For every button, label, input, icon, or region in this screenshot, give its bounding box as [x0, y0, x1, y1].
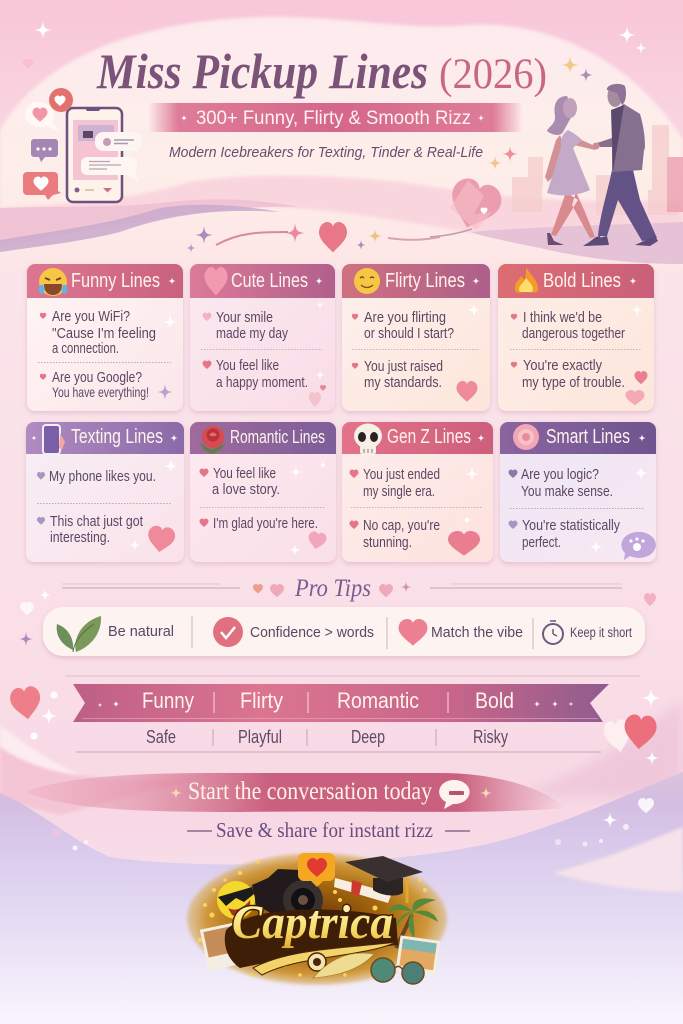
panel: Flirty Lines: You just raised [364, 359, 443, 375]
panel: Flirty Lines: Flirty Lines [385, 270, 465, 292]
panel: Gen Z Lines: You just ended [363, 467, 440, 483]
panel: Cute Lines: a happy moment. [216, 375, 308, 391]
skyline [512, 125, 683, 215]
panel: Smart Lines: You're statistically [522, 518, 621, 534]
panel: Bold Lines: my type of trouble. [522, 375, 625, 391]
man [583, 84, 658, 246]
title: Miss Pickup Lines [96, 43, 428, 99]
icon: dots speech bubble [31, 139, 58, 162]
panel: Texting Lines: Texting Lines [71, 426, 163, 448]
tone labels row: Risky [473, 727, 508, 747]
panel: Texting Lines [26, 422, 184, 562]
icon: smiling emoji [354, 268, 380, 294]
ribbon: tone scale: Funny [142, 688, 194, 713]
camera [252, 869, 323, 920]
panel: Bold Lines: dangerous together [522, 326, 625, 342]
icon: phone with chat bubbles [23, 88, 142, 202]
icon: stopwatch [543, 621, 563, 644]
panel: Cute Lines [190, 264, 335, 411]
ribbon: tone scale: Flirty [240, 688, 283, 713]
sunglasses emoji [217, 881, 255, 919]
panel: tips bar: Keep it short [570, 625, 632, 640]
tone labels row [76, 727, 601, 752]
woman [545, 96, 604, 246]
panel: Romantic Lines: Romantic Lines [230, 427, 325, 447]
panel: Funny Lines: You have everything! [52, 384, 149, 400]
heading: Pro Tips: Pro Tips [294, 575, 371, 602]
save and share line: Save & share for instant rizz [216, 818, 433, 842]
tone labels row: Deep [351, 727, 385, 747]
icon: pink rose [513, 424, 539, 450]
dark plate behind wordmark [225, 909, 398, 968]
side heart [644, 593, 656, 606]
panel: Smart Lines: You make sense. [521, 484, 613, 500]
panel: tips bar: Confidence > words [250, 624, 374, 641]
panel: Texting Lines: This chat just got [50, 514, 143, 530]
diploma scroll [334, 878, 392, 903]
panel: Flirty Lines [342, 264, 490, 411]
title sparkles [561, 56, 593, 82]
panel: Flirty Lines: or should I start? [364, 326, 454, 342]
heading: Pro Tips [62, 575, 622, 602]
icon: heart card bubble [23, 172, 61, 200]
panel: Texting Lines: My phone likes you. [49, 469, 156, 485]
background sparkles [20, 21, 661, 850]
palm tree [388, 898, 438, 948]
icon: smartphone [43, 425, 65, 454]
panel: Funny Lines: Are you Google? [52, 370, 142, 386]
icon: heart [398, 619, 428, 646]
panel: Gen Z Lines [342, 422, 493, 562]
panel: Gen Z Lines: stunning. [363, 535, 412, 551]
icon: red heart badge [49, 88, 73, 112]
panel: Gen Z Lines: Gen Z Lines [387, 426, 471, 448]
panel: Bold Lines: You're exactly [523, 358, 603, 374]
aperture [308, 953, 326, 971]
panel: Smart Lines: Are you logic? [521, 467, 599, 483]
panel: Romantic Lines [190, 422, 336, 562]
panel: Gen Z Lines: my single era. [363, 484, 435, 500]
lettering swoosh [253, 942, 397, 975]
tone labels row: Safe [146, 727, 176, 747]
sunglasses [371, 958, 424, 984]
panel: Texting Lines: interesting. [50, 530, 110, 546]
ribbon: tone scale: Romantic [337, 688, 419, 713]
icon: speech bubble [439, 780, 470, 809]
panel: Romantic Lines: You feel like [213, 466, 276, 482]
panel: Bold Lines: I think we'd be [523, 310, 602, 326]
call to action banner: Start the conversation today [188, 778, 432, 805]
tagline: Modern Icebreakers for Texting, Tinder & Real-Life [169, 144, 483, 161]
icon: heart speech bubble [25, 102, 59, 131]
panel: Romantic Lines: a love story. [212, 482, 280, 498]
lower ornament: hearts and swashes [186, 222, 440, 253]
tone labels row: Playful [238, 727, 282, 747]
ribbon: tone scale [73, 684, 609, 722]
panel: Cute Lines: Your smile [216, 310, 273, 326]
title: (2026) [439, 51, 547, 98]
decorative hearts left [9, 685, 57, 740]
panel: Flirty Lines: my standards. [364, 375, 442, 391]
panel: Bold Lines [498, 264, 654, 411]
panel: tips bar [43, 607, 645, 656]
icon: flame [515, 267, 538, 293]
panel: Smart Lines [500, 422, 656, 562]
graduation cap [345, 856, 423, 903]
icon: pink heart [204, 267, 228, 296]
feather [313, 953, 374, 978]
tagline sparkles [488, 146, 518, 170]
subtitle ribbon [148, 103, 523, 132]
icon: red rose [200, 426, 226, 454]
icon: laughing emoji [39, 268, 67, 296]
icon: skull [354, 424, 382, 454]
icon: large faceted heart [430, 174, 506, 237]
icon: leaves [57, 616, 101, 652]
glitter [198, 860, 432, 977]
panel: Funny Lines: a connection. [52, 341, 119, 357]
panel: Funny Lines [27, 264, 183, 411]
panel: Gen Z Lines: No cap, you're [363, 518, 440, 534]
panel: Cute Lines: Cute Lines [231, 270, 308, 292]
panel: Cute Lines: made my day [216, 326, 289, 342]
left photo [200, 923, 241, 971]
panel: Cute Lines: You feel like [216, 358, 279, 374]
logo wordmark: Captrica [232, 896, 393, 949]
panel: Romantic Lines: I'm glad you're here. [213, 516, 318, 532]
right photo [396, 935, 440, 977]
icon: paw chat bubble [621, 532, 656, 560]
panel: Bold Lines: Bold Lines [543, 270, 621, 292]
icon: check badge [213, 617, 243, 647]
decorative hearts right [602, 714, 658, 754]
panel: Funny Lines: Funny Lines [71, 270, 160, 292]
logo: Captrica [187, 853, 447, 985]
panel: Funny Lines: Are you WiFi? [52, 309, 130, 325]
panel: Smart Lines: perfect. [522, 535, 561, 551]
ribbon: tone scale: Bold [475, 688, 514, 713]
panel: Funny Lines: "Cause I'm feeling [52, 326, 156, 342]
subtitle ribbon: 300+ Funny, Flirty & Smooth Rizz [196, 108, 471, 129]
side sparkle [19, 632, 33, 646]
panel: Smart Lines: Smart Lines [546, 426, 630, 448]
illustration: couple holding hands [545, 84, 658, 246]
panel: tips bar: Match the vibe [431, 624, 523, 641]
heart bubble [298, 853, 335, 887]
panel: Flirty Lines: Are you flirting [364, 310, 446, 326]
panel: tips bar: Be natural [108, 623, 174, 640]
call to action banner [26, 773, 566, 812]
